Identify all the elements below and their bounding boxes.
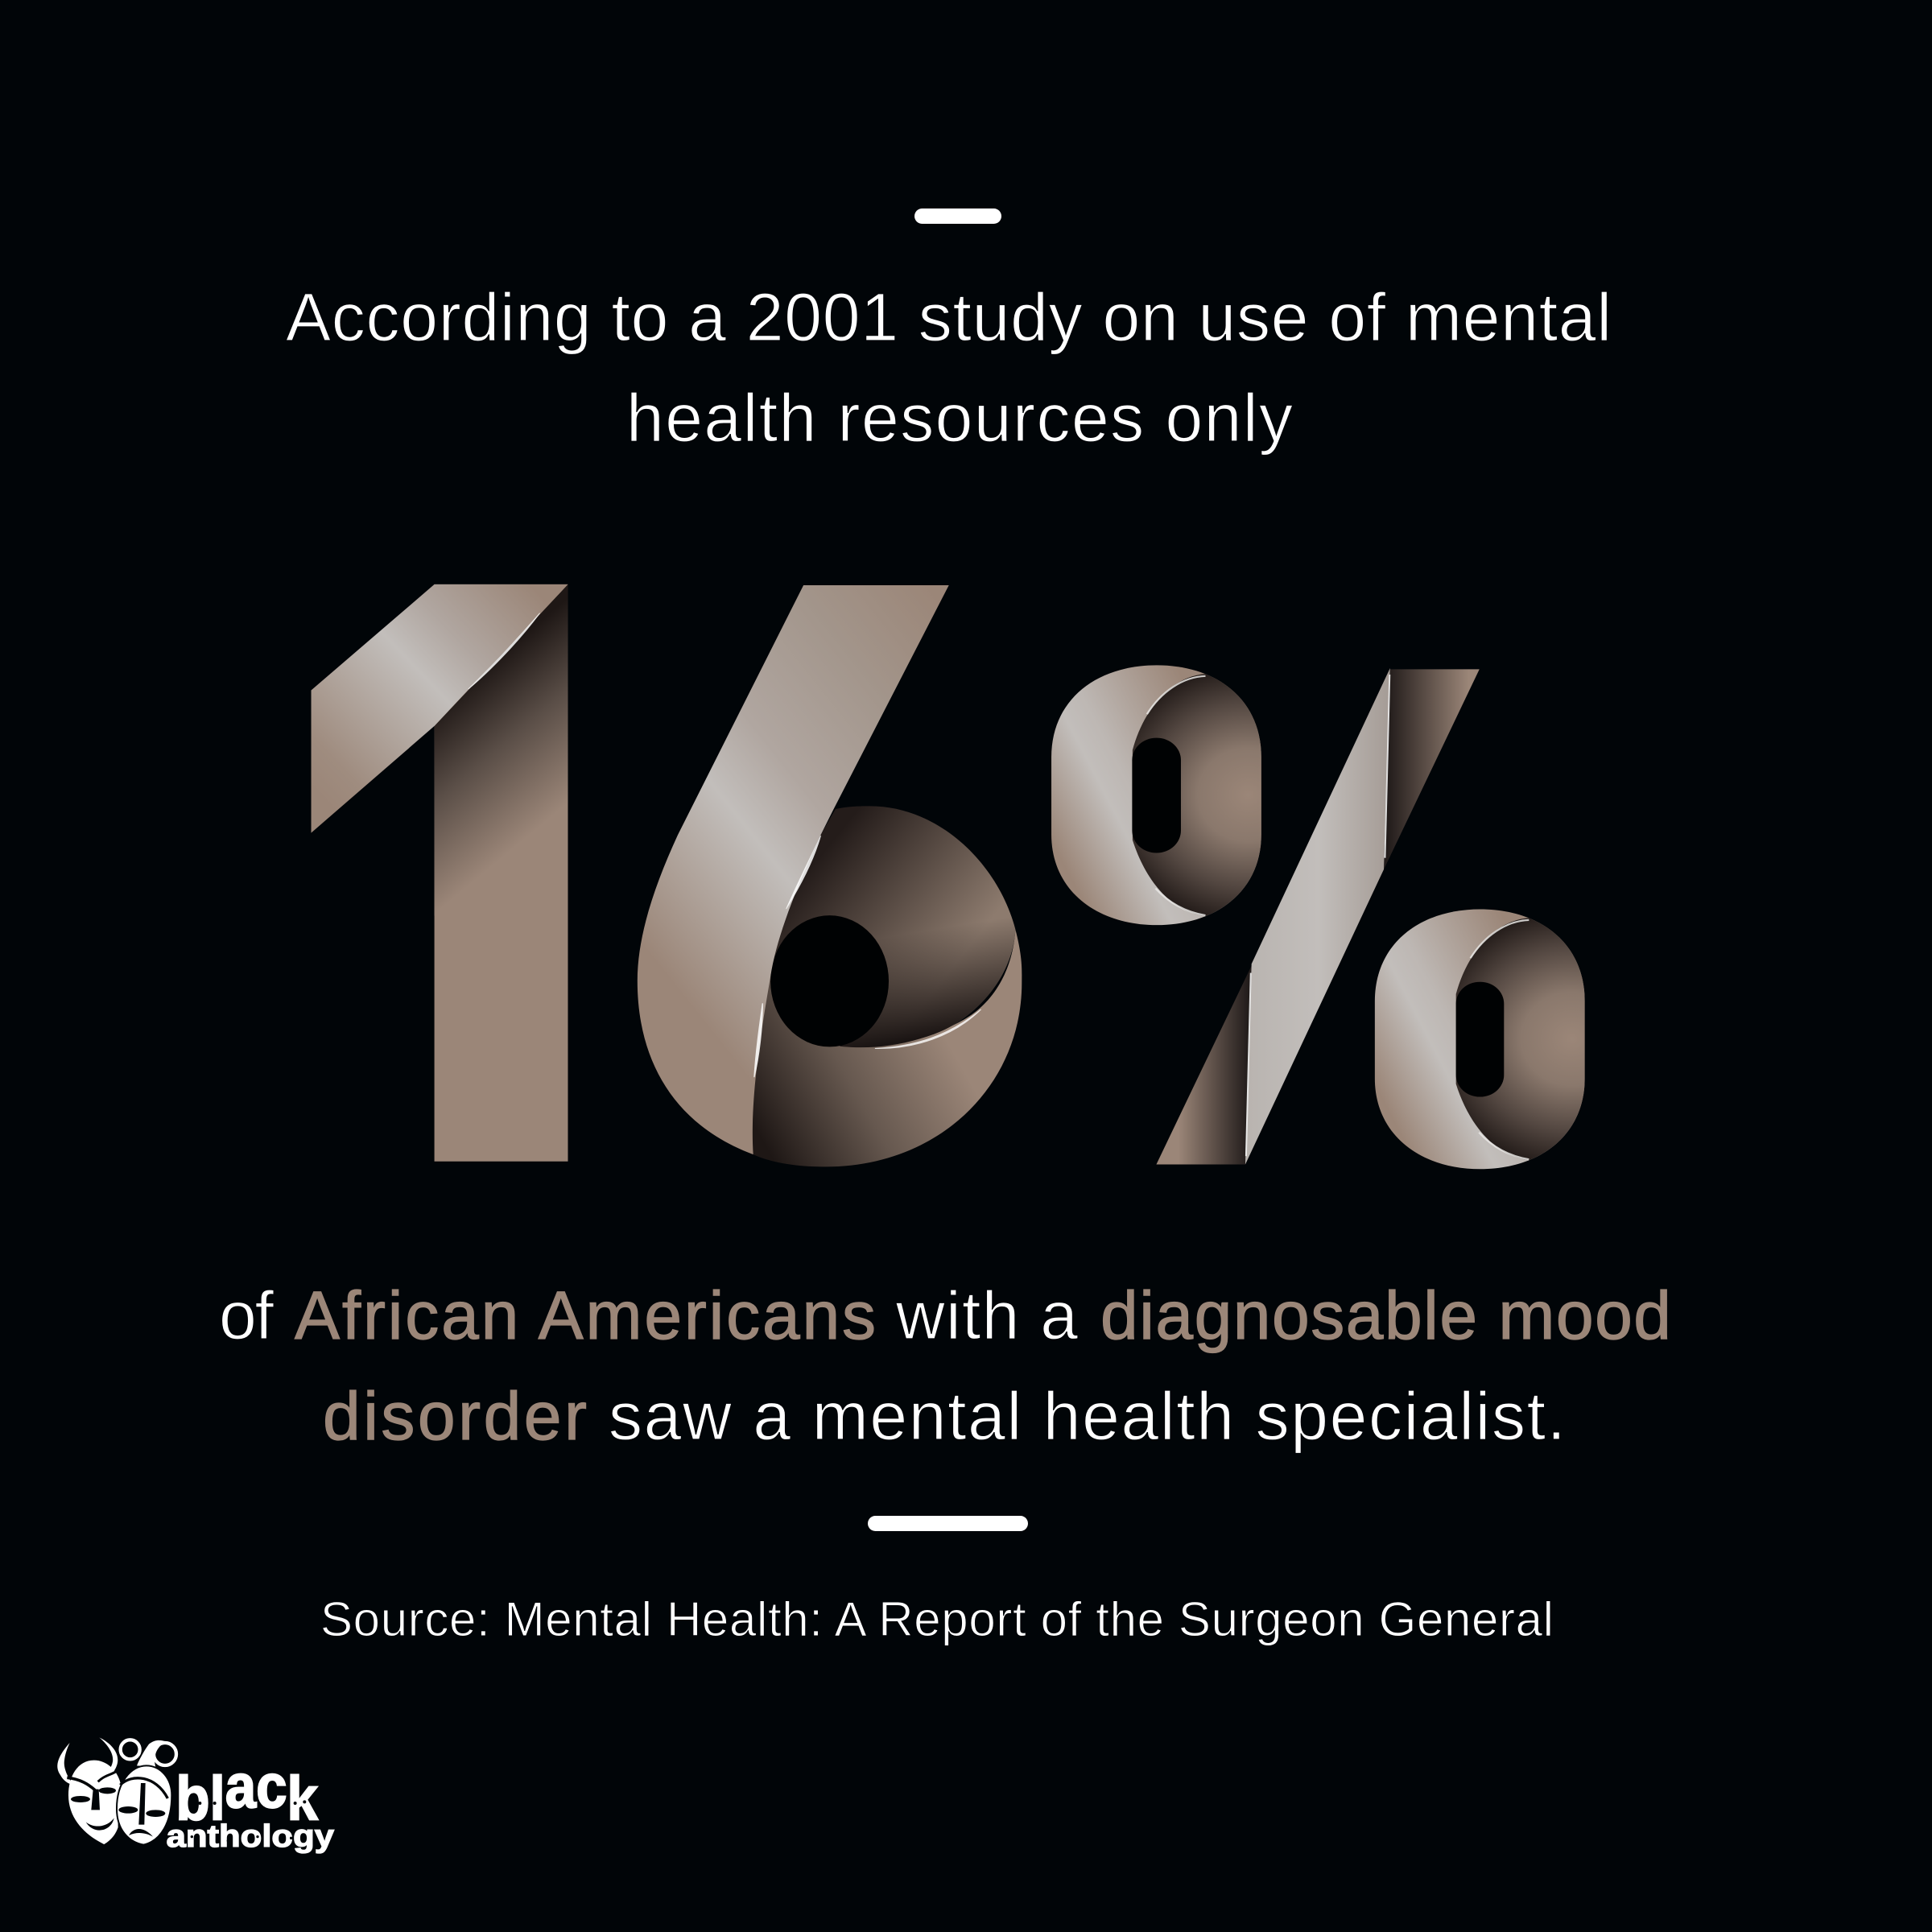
bottom divider bar — [868, 1516, 1028, 1531]
infographic canvas — [57, 208, 1668, 1854]
logo wordmark — [167, 1752, 334, 1854]
body text: diagnosable mood — [1100, 1278, 1671, 1353]
percent sign — [1051, 665, 1611, 1169]
body text: saw a mental health specialist. — [609, 1378, 1566, 1454]
percent upper circle — [1051, 665, 1261, 926]
icon: theatre masks — [57, 1737, 176, 1845]
body text: with a — [895, 1278, 1078, 1353]
big number 16 — [312, 584, 1022, 1166]
intro text: health resources only — [626, 380, 1293, 456]
logo wordmark: anthology — [167, 1818, 334, 1854]
body text: African Americans — [295, 1278, 876, 1353]
top divider bar — [914, 208, 1001, 224]
logo: black anthology — [57, 1737, 334, 1854]
body text: disorder — [323, 1378, 587, 1454]
intro text — [286, 279, 1612, 456]
digit 1 — [312, 584, 568, 1162]
source line: Source: Mental Health: A Report of the Surgeon General — [320, 1592, 1554, 1646]
body text: of — [219, 1278, 275, 1353]
digit 6 — [638, 585, 1022, 1166]
logo wordmark: black — [175, 1752, 318, 1834]
percent lower circle — [1375, 910, 1585, 1169]
body text — [219, 1278, 1671, 1454]
intro text: According to a 2001 study on use of mental — [286, 279, 1612, 355]
percent slash — [1156, 668, 1480, 1164]
